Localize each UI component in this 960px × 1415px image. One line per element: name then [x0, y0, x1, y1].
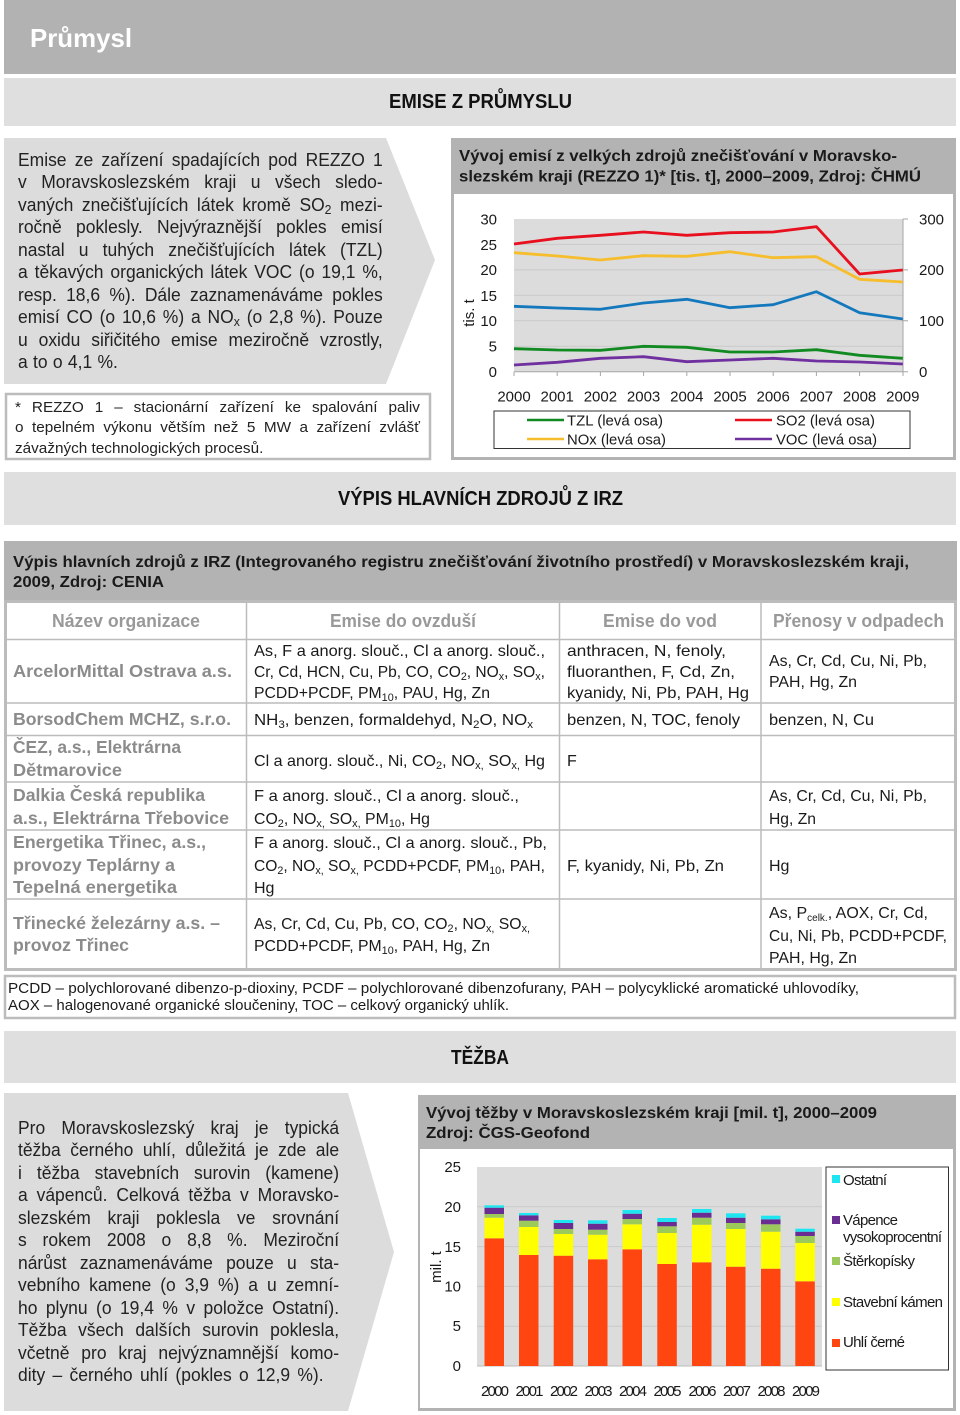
row: Třinecké železárny: , AOX, Cr, Cd,	[828, 905, 928, 922]
row: Dalkia: As, Cr, Cd, Cu, Ni, Pb,	[769, 788, 927, 805]
text block: emissions commentary: v Moravskoslezském kraji u všech sledo-	[18, 172, 383, 192]
year labels: 2002	[584, 388, 617, 406]
table header row: Název organizace	[52, 611, 200, 631]
text block: REZZO 1 footnote: o tepelném výkonu větším než 5 MW a zařízení zvlášť	[15, 419, 420, 436]
text block: mining commentary: a vápenců. Celková těžba v Moravsko-	[18, 1185, 339, 1205]
row: Třinecké železárny: provoz Třinec	[13, 935, 129, 955]
text block: mining commentary: s rokem 2008 o 8,8 %. Meziroční	[18, 1230, 339, 1250]
year labels: 2009	[792, 1383, 820, 1400]
heading: emise z průmyslu	[4, 78, 956, 126]
heading: výpis hlavních zdrojů: VÝPIS HLAVNÍCH ZDROJŮ Z IRZ	[338, 484, 623, 510]
text block: emissions commentary: a to o 4,1 %.	[18, 352, 118, 372]
row: Dalkia	[13, 784, 927, 830]
plot area with grid	[477, 1167, 822, 1366]
row: Energetika Třinec: SO	[324, 858, 351, 875]
row: ČEZ: F	[567, 753, 577, 770]
row: ArcelorMittal: As, F a anorg. slouč., Cl a anorg. slouč.,	[254, 643, 545, 660]
panel: line chart of emissions	[451, 138, 956, 460]
row: Dalkia: PM	[361, 811, 389, 828]
row: Třinecké železárny: 10	[382, 945, 394, 957]
year labels: 2006	[688, 1383, 716, 1400]
year labels: 2004	[670, 388, 703, 406]
y axis labels: 15	[444, 1239, 461, 1256]
row: ArcelorMittal: kyanidy, Ni, Pb, PAH, Hg	[567, 685, 749, 702]
table title band: 2009, Zdroj: CENIA	[13, 574, 164, 591]
row: BorsodChem: benzen, N, TOC, fenoly	[567, 712, 740, 729]
arrow panel: emissions text background	[4, 138, 435, 384]
legend: Uhlí černé	[843, 1334, 905, 1351]
row: ArcelorMittal: fluoranthen, F, Cd, Zn,	[567, 664, 735, 681]
year labels: 2008	[758, 1383, 786, 1400]
left axis labels: 25	[480, 237, 497, 254]
row: Dalkia: , NO	[284, 811, 316, 828]
row: ČEZ: SO	[484, 753, 511, 770]
year labels: 2005	[713, 388, 747, 406]
right axis labels: 100	[919, 313, 944, 330]
table header row: Emise do ovzduší	[330, 611, 477, 631]
row: Energetika Třinec: x,	[315, 865, 324, 877]
row: Třinecké železárny: PAH, Hg, Zn	[769, 950, 857, 967]
row: Dalkia: , Hg	[401, 811, 430, 828]
row: BorsodChem	[13, 709, 874, 731]
line series	[514, 227, 903, 365]
row: Energetika Třinec: Energetika Třinec, a.s.,	[13, 832, 206, 852]
legend: vysokoprocentní	[843, 1229, 943, 1246]
row: Dalkia: CO	[254, 811, 278, 828]
text block: emissions commentary: u oxidu siřičitého emise meziročně vzrostly,	[18, 330, 383, 350]
row: ČEZ: ČEZ, a.s., Elektrárna	[13, 736, 181, 757]
row: ArcelorMittal: x	[499, 671, 505, 683]
chart title: Zdroj: ČGS-Geofond	[426, 1123, 590, 1142]
text block: mining commentary: ho plynu (o 19,4 % v položce Ostatní).	[18, 1298, 339, 1318]
row: ČEZ: x,	[511, 760, 520, 772]
left axis labels: 0	[489, 364, 497, 381]
row: ČEZ: , NO	[442, 753, 475, 770]
year labels: 2007	[800, 388, 833, 406]
heading: výpis hlavních zdrojů	[4, 472, 956, 525]
row: BorsodChem: O, NO	[479, 712, 527, 729]
year labels: 2007	[723, 1383, 751, 1400]
y axis labels	[444, 1159, 461, 1375]
text block: mining commentary: slezském kraji poklesla ve srovnání	[18, 1208, 339, 1228]
row: ArcelorMittal: 10	[382, 692, 394, 704]
row: ArcelorMittal: , SO	[504, 664, 535, 681]
chart title: Vývoj těžby v Moravskoslezském kraji [mil. t], 2000–2009	[426, 1105, 877, 1122]
year labels: 2000	[497, 388, 531, 406]
y axis labels: 25	[444, 1159, 461, 1176]
legend: SO2 (levá osa)	[776, 412, 875, 430]
row: Dalkia: a.s., Elektrárna Třebovice	[13, 808, 229, 828]
row: Dalkia: SO	[325, 811, 352, 828]
row: Energetika Třinec: Hg	[254, 880, 274, 897]
row: Třinecké železárny	[13, 905, 947, 967]
year labels: 2003	[627, 388, 660, 406]
legend: Vápence	[843, 1212, 898, 1229]
abbreviations box: AOX – halogenované organické sloučeniny, TOC – celkový organický uhlík.	[8, 997, 509, 1014]
page title band: Průmysl	[30, 23, 132, 53]
y axis labels: 20	[444, 1199, 461, 1216]
row: Třinecké železárny: As, Cr, Cd, Cu, Pb, CO, CO	[254, 916, 450, 933]
row: Třinecké železárny: PCDD+PCDF, PM	[254, 938, 383, 955]
left axis labels: 20	[480, 262, 497, 279]
row: ČEZ: Dětmarovice	[13, 760, 122, 780]
year labels	[481, 1383, 820, 1400]
chart title: Vývoj emisí z velkých zdrojů znečišťování v Moravsko-	[459, 148, 897, 165]
row: Energetika Třinec: PCDD+PCDF, PM	[359, 858, 489, 875]
chart title	[459, 148, 921, 186]
text block: mining commentary: nárůst zaznamenáváme pouze u sta-	[18, 1253, 339, 1273]
plot area with grid	[514, 219, 908, 376]
text block: mining commentary: i těžba stavebních surovin (kamene)	[18, 1163, 339, 1183]
text block: emissions commentary: ročně poklesly. Nejvýraznější pokles emisí	[18, 217, 383, 237]
text block: REZZO 1 footnote	[15, 398, 420, 456]
heading: emise z průmyslu: EMISE Z PRŮMYSLU	[389, 87, 572, 113]
row: ArcelorMittal: 2	[461, 671, 467, 683]
y axis labels: 0	[453, 1358, 461, 1375]
row: ArcelorMittal: Cr, Cd, HCN, Cu, Pb, CO, CO	[254, 664, 466, 681]
axis title: mil. t: mil. t	[428, 1250, 445, 1283]
row: BorsodChem: BorsodChem MCHZ, s.r.o.	[13, 709, 231, 729]
row: Třinecké železárny: , NO	[454, 916, 486, 933]
row: Třinecké železárny: 2	[448, 923, 454, 935]
row: Třinecké železárny: , PAH, Hg, Zn	[394, 938, 490, 955]
text block: emissions commentary: emisí CO (o 10,6 %) a NOx (o 2,8 %). Pouze	[18, 307, 383, 329]
row: Dalkia: x,	[316, 818, 325, 830]
row: ArcelorMittal: As, Cr, Cd, Cu, Ni, Pb,	[769, 653, 927, 670]
text block: mining commentary: těžba černého uhlí, důležitá je zde ale	[18, 1140, 339, 1160]
row: ArcelorMittal: , NO	[467, 664, 499, 681]
row: Energetika Třinec: 10	[489, 865, 501, 877]
text block: mining commentary: Pro Moravskoslezský kraj je typická	[18, 1118, 339, 1138]
table header row: Emise do vod	[603, 611, 717, 631]
row: ArcelorMittal	[13, 643, 927, 704]
y axis labels: 10	[444, 1278, 461, 1296]
table header row	[52, 611, 944, 631]
text block: emissions commentary: resp. 18,6 %). Dále zaznamenáváme pokles	[18, 285, 383, 305]
year labels: 2000	[481, 1383, 509, 1400]
year labels: 2005	[654, 1383, 682, 1400]
legend: Štěrkopísky	[843, 1253, 916, 1270]
row: BorsodChem: , benzen, formaldehyd, N	[285, 712, 473, 729]
chart title	[426, 1105, 877, 1142]
left axis labels: 10	[480, 313, 497, 330]
right axis labels: 300	[919, 212, 944, 228]
row: Třinecké železárny: SO	[494, 916, 522, 933]
legend	[826, 1167, 948, 1370]
row: ČEZ: 2	[436, 760, 442, 772]
text block: emissions commentary: vaných znečišťujících látek kromě SO2 mezi-	[18, 195, 383, 217]
row: ArcelorMittal: PAH, Hg, Zn	[769, 674, 857, 691]
row: ČEZ: x,	[475, 760, 484, 772]
legend: NOx (levá osa)	[567, 432, 666, 448]
row: Dalkia: Dalkia Česká republika	[13, 784, 205, 805]
year labels	[497, 388, 919, 406]
chart title: slezském kraji (REZZO 1)* [tis. t], 2000–2009, Zdroj: ČHMÚ	[459, 166, 921, 186]
table title band	[4, 541, 957, 601]
text block: emissions commentary: nastal u tuhých znečišťujících látek (TZL)	[18, 240, 383, 260]
table title band: Výpis hlavních zdrojů z IRZ (Integrovaného registru znečišťování životního prostředí) v Moravskoslezském kraji,	[13, 554, 909, 571]
row: ArcelorMittal: ,	[541, 664, 545, 681]
text block: mining commentary: včetně pro kraj nejvýznamnější komo-	[18, 1343, 339, 1363]
year labels: 2009	[886, 388, 919, 406]
year labels: 2001	[516, 1383, 544, 1400]
row: Energetika Třinec: Hg	[769, 858, 789, 875]
heading: těžba: TĚŽBA	[451, 1045, 509, 1069]
axis title: tis. t: tis. t	[461, 298, 478, 327]
text block: REZZO 1 footnote: * REZZO 1 – stacionární zařízení ke spalování paliv	[15, 398, 420, 416]
text block: emissions commentary: Emise ze zařízení spadajících pod REZZO 1	[18, 150, 383, 170]
row: Energetika Třinec: , NO	[283, 858, 315, 875]
year labels: 2003	[584, 1383, 612, 1400]
table header row: Přenosy v odpadech	[773, 611, 944, 631]
text block: mining commentary: Těžba všech dalších surovin poklesla,	[18, 1320, 339, 1340]
row: ArcelorMittal: PCDD+PCDF, PM	[254, 685, 383, 702]
row: Dalkia: 2	[278, 818, 284, 830]
legend: Ostatní	[843, 1172, 888, 1189]
row: ČEZ: Cl a anorg. slouč., Ni, CO	[254, 753, 435, 770]
year labels: 2006	[757, 388, 790, 406]
row: Energetika Třinec: , PAH,	[501, 858, 545, 875]
legend: VOC (levá osa)	[776, 432, 877, 448]
y axis labels: 5	[453, 1318, 461, 1335]
row: Energetika Třinec: F, kyanidy, Ni, Pb, Zn	[567, 858, 724, 875]
row: ArcelorMittal: ArcelorMittal Ostrava a.s.	[13, 661, 232, 681]
row: Energetika Třinec	[13, 832, 789, 897]
row: Dalkia: 10	[389, 818, 401, 830]
year labels: 2008	[843, 388, 876, 406]
row: Třinecké železárny: celk.	[807, 913, 828, 924]
row: BorsodChem: 3	[278, 719, 285, 731]
abbreviations box	[5, 976, 955, 1018]
row: Energetika Třinec: F a anorg. slouč., Cl a anorg. slouč., Pb,	[254, 835, 547, 852]
row: BorsodChem: x	[527, 719, 534, 731]
row: Třinecké železárny: Cu, Ni, Pb, PCDD+PCDF,	[769, 928, 947, 945]
text block: mining commentary	[18, 1118, 340, 1385]
stacked bars	[484, 1205, 815, 1366]
footnote box: REZZO 1	[6, 394, 430, 459]
text block: emissions commentary	[18, 150, 383, 372]
text block: mining commentary: dity – černého uhlí (pokles o 12,9 %).	[18, 1365, 324, 1385]
row: Třinecké železárny: x,	[486, 923, 494, 935]
row: Dalkia: Hg, Zn	[769, 811, 816, 828]
arrow panel: mining text background	[4, 1093, 394, 1411]
year labels: 2004	[619, 1383, 647, 1400]
left axis labels	[480, 212, 497, 381]
abbreviations box: PCDD – polychlorované dibenzo-p-dioxiny, PCDF – polychlorované dibenzofurany, PAH – polycyklické aromatické uhlovodíky,	[8, 980, 859, 997]
row: Dalkia: x,	[352, 818, 361, 830]
row: ArcelorMittal: x	[535, 671, 541, 683]
page title band	[4, 0, 956, 74]
legend	[494, 411, 910, 448]
left axis labels: 30	[480, 212, 497, 228]
right axis labels	[919, 212, 944, 381]
row: Energetika Třinec: 2	[277, 865, 283, 877]
row: Třinecké železárny: x,	[522, 923, 530, 935]
text block: REZZO 1 footnote: závažných technologických procesů.	[15, 440, 263, 456]
row: ČEZ	[13, 736, 577, 780]
row: Energetika Třinec: provozy Teplárny a	[13, 855, 175, 875]
right axis labels: 0	[919, 364, 927, 381]
row: ArcelorMittal: anthracen, N, fenoly,	[567, 643, 726, 660]
year labels: 2002	[550, 1383, 578, 1400]
table: main IRZ sources	[5, 601, 956, 970]
row: BorsodChem: benzen, N, Cu	[769, 712, 874, 729]
row: Dalkia: F a anorg. slouč., Cl a anorg. slouč.,	[254, 788, 519, 805]
legend: Stavební kámen	[843, 1294, 943, 1311]
row: Energetika Třinec: Tepelná energetika	[13, 877, 177, 897]
left axis labels: 5	[489, 338, 497, 356]
row: Třinecké železárny: As, P	[769, 905, 807, 922]
panel: stacked bar chart of mining	[418, 1095, 956, 1411]
left axis labels: 15	[480, 288, 497, 305]
row: Třinecké železárny: Třinecké železárny a.s. –	[13, 913, 220, 933]
legend: TZL (levá osa)	[567, 412, 663, 430]
heading: těžba	[4, 1031, 956, 1083]
row: ArcelorMittal: , PAU, Hg, Zn	[394, 685, 490, 702]
text block: emissions commentary: a těkavých organických látek VOC (o 19,1 %,	[18, 262, 383, 282]
year labels: 2001	[541, 388, 574, 406]
row: Energetika Třinec: CO	[254, 858, 278, 875]
right axis labels: 200	[919, 262, 944, 279]
text block: mining commentary: vebního kamene (o 3,9 %) a u zemní-	[18, 1275, 339, 1295]
row: ČEZ: Hg	[520, 753, 545, 770]
row: BorsodChem: NH	[254, 712, 277, 729]
row: BorsodChem: 2	[473, 719, 479, 731]
row: Energetika Třinec: x,	[351, 865, 359, 877]
